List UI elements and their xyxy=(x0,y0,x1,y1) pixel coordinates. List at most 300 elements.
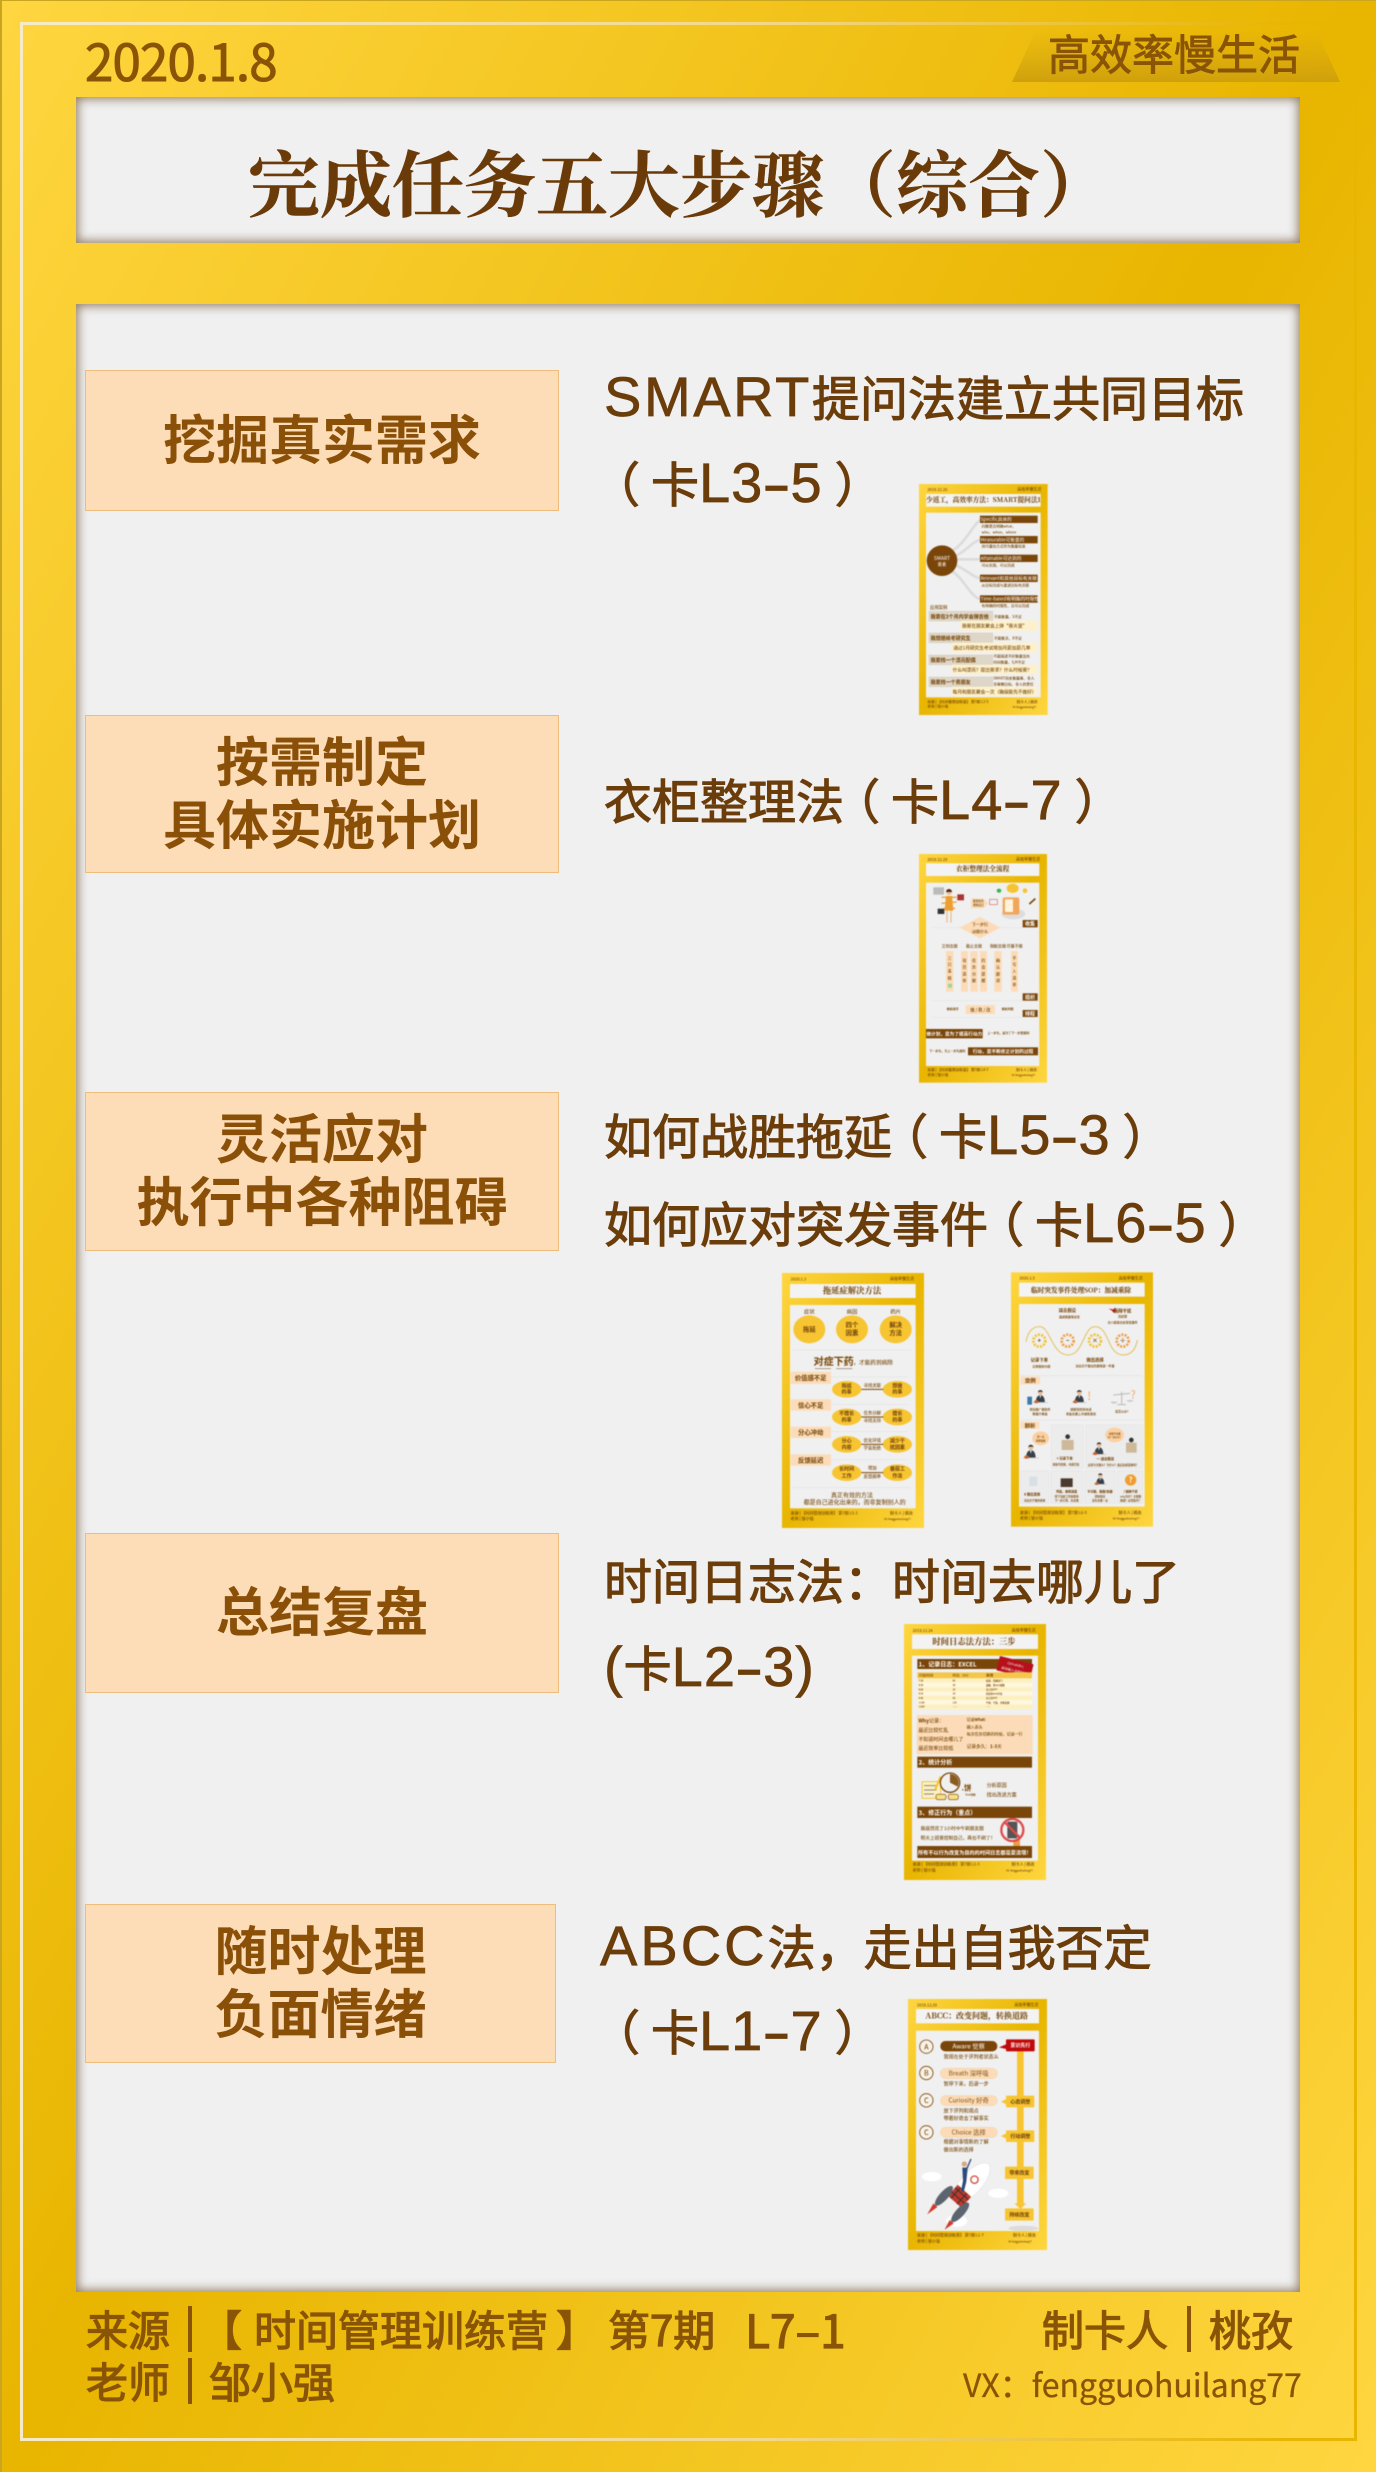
thumbnail: wardrobe method: 目 xyxy=(962,965,966,971)
thumbnail: time log: .饼 xyxy=(962,1783,972,1794)
thumbnail: time log: 来源 | 【时间管理训练营】 第7期 L2-3 xyxy=(913,1861,980,1868)
thumbnail: time log: 起床、洗漱出门 xyxy=(986,1679,1003,1683)
thumbnail: procrastination: ，才能药到病除 xyxy=(853,1357,893,1366)
thumbnail: procrastination: 拖延 xyxy=(803,1324,816,1333)
thumbnail: time log: 查工作PPT xyxy=(986,1687,998,1691)
thumbnail: emergency SOP: 迅如雷 xyxy=(1118,1314,1127,1319)
step 2 text: 衣柜整理法（卡L4–7） xyxy=(604,763,1123,833)
thumbnail: emergency SOP: 离线？必须放弃？ xyxy=(1120,1498,1141,1502)
thumbnail: SMART: 我要找一个漂亮配偶 xyxy=(931,657,976,664)
date: 2020.1.8 xyxy=(85,22,277,96)
thumbnail: SMART: 高效率慢生活 xyxy=(1017,486,1041,493)
thumbnail: emergency SOP xyxy=(1010,1272,1154,1528)
panel: main content xyxy=(76,304,1300,2292)
thumbnail: procrastination: 优化环境 xyxy=(864,1437,882,1444)
thumbnail: time log: 记录What: xyxy=(967,1716,986,1723)
step 3 text line 2: 如何应对突发事件（卡L6–5） xyxy=(604,1186,1267,1256)
thumbnail: wardrobe method: 下一步行 xyxy=(972,921,988,928)
thumbnail: ABCC: Choice 选择 xyxy=(952,2127,986,2136)
thumbnail: emergency SOP: why为什？主要做 xyxy=(1120,1494,1142,1498)
step 4 label xyxy=(85,1533,559,1693)
thumbnail: SMART: 要素 xyxy=(938,561,947,568)
thumbnail: time log: 输入表头 xyxy=(967,1723,983,1730)
thumbnail: procrastination: 学会拒绝 xyxy=(864,1445,882,1452)
footer: teacher: 老师 xyxy=(86,2350,170,2411)
thumbnail: wardrobe method: 务 xyxy=(972,964,976,971)
thumbnail: emergency SOP: 来源 | 【时间管理训练营】 第7期 L6-5 xyxy=(1020,1509,1087,1516)
thumbnail: wardrobe method: 写 xyxy=(1012,962,1016,968)
footer: author: 制卡人 xyxy=(1042,2298,1168,2359)
thumbnail: procrastination: 的事 xyxy=(892,1417,902,1424)
thumbnail: SMART: 应用案例 xyxy=(930,604,947,611)
thumbnail: SMART: 不能衡量、S不足 xyxy=(994,614,1022,620)
thumbnail: time log: 时长（m） xyxy=(953,1673,971,1679)
thumbnail: ABCC: B xyxy=(924,2069,929,2079)
thumbnail: procrastination: 病因 xyxy=(847,1307,857,1315)
thumbnail: emergency SOP: 必须今天做么？为什么？最后完成就够吗？ xyxy=(1088,1463,1138,1467)
thumbnail: procrastination: 反馈频率 xyxy=(864,1473,882,1480)
thumbnail: SMART: who、when、where xyxy=(982,530,1016,535)
thumbnail: wardrobe method: 行动，是不断修正计划的过程 xyxy=(973,1048,1034,1055)
thumbnail: wardrobe method: 做计划，是为了提高行动力 xyxy=(926,1030,983,1037)
thumbnail: wardrobe method: VX: fengguohuilang77 xyxy=(1012,1073,1036,1077)
thumbnail: procrastination: 减少干 xyxy=(890,1437,905,1444)
thumbnail: procrastination: 反馈延迟 xyxy=(798,1455,824,1464)
thumbnail: emergency SOP: 老师 | 邹小强 xyxy=(1020,1514,1043,1521)
thumbnail: procrastination: 2020.1.3 xyxy=(791,1276,806,1282)
thumbnail: procrastination: 解决 xyxy=(889,1320,903,1329)
thumbnail: time log: 不知道时间去哪儿了 xyxy=(918,1736,963,1743)
thumbnail: wardrobe method: 认 xyxy=(996,964,1000,971)
thumbnail: time log: 开始时间 xyxy=(919,1673,934,1679)
thumbnail: emergency SOP: + xyxy=(1038,1336,1042,1345)
thumbnail: emergency SOP: − xyxy=(1066,1336,1070,1345)
thumbnail: time log: 查工作PPT xyxy=(986,1696,998,1700)
step 1 text: SMART提问法建立共同目标 xyxy=(604,360,1244,430)
thumbnail: SMART: 制卡人 | 桃孜 xyxy=(1017,699,1038,705)
thumbnail: procrastination: 拖延症解决方法 xyxy=(823,1284,882,1296)
thumbnail: wardrobe method: 尽量不做 xyxy=(1007,943,1023,950)
thumbnail: ABCC xyxy=(907,1998,1048,2251)
thumbnail: procrastination: 来源 | 【时间管理训练营】 第7期 L5-3 xyxy=(791,1510,858,1517)
step 1 reference: （卡L3–5） xyxy=(592,446,883,516)
thumbnail: procrastination: 分心 xyxy=(842,1437,852,1444)
thumbnail: procrastination xyxy=(781,1272,925,1529)
thumbnail: ABCC: 做出新的选择 xyxy=(944,2147,974,2154)
thumbnail: SMART: 用可量化方式作为衡量标准 xyxy=(982,544,1026,550)
thumbnail: wardrobe method: 解 xyxy=(972,977,976,984)
thumbnail: emergency SOP: 制卡人 | 桃孜 xyxy=(1119,1509,1142,1516)
thumbnail: time log: 80 xyxy=(953,1696,956,1700)
thumbnail: SMART: 从目标完成与复述目标有关联 xyxy=(982,582,1030,588)
footer: source: L7–1 xyxy=(745,2296,846,2362)
thumbnail: time log: 找出改进方案 xyxy=(987,1792,1017,1799)
step 3 label: 执行中各种阻碍 xyxy=(136,1161,508,1237)
thumbnail: ABCC: C xyxy=(924,2096,929,2106)
thumbnail: wardrobe method: 排程 xyxy=(1025,1010,1035,1017)
thumbnail: time log: 明天上班要控制自己，再也不刷了！ xyxy=(921,1835,995,1842)
thumbnail: ABCC: 高效率慢生活 xyxy=(1014,2001,1038,2008)
thumbnail: wardrobe method: 分 xyxy=(972,970,976,977)
thumbnail: wardrobe method: 老师 | 邹小强 xyxy=(927,1072,949,1078)
thumbnail: ABCC: 心态调整 xyxy=(1010,2098,1030,2105)
thumbnail: time log: 每次任务切换的时候，记录一行 xyxy=(967,1730,1023,1737)
thumbnail: time log: 所有不以行为改变为目的的时间日志都是耍流氓！ xyxy=(918,1848,1031,1856)
thumbnail: time log: 20 xyxy=(953,1692,956,1696)
thumbnail: wardrobe method: 项 xyxy=(962,957,966,964)
thumbnail: SMART: Specific具体的 xyxy=(981,516,1012,523)
thumbnail: time log: 9:20 xyxy=(919,1692,924,1696)
thumbnail: emergency SOP: 去人能接去处突发事件 xyxy=(1108,1319,1138,1324)
thumbnail: SMART: Measurable可衡量的 xyxy=(981,536,1025,543)
thumbnail: emergency SOP: 不可能、能做/热做 xyxy=(1087,1489,1113,1494)
thumbnail: SMART: Time-based有明确的时限性 xyxy=(981,596,1039,603)
thumbnail: SMART: 我要找一个男朋友 xyxy=(931,679,971,686)
thumbnail: wardrobe method: 来源 | 【时间管理训练营】 第7期 L4-7 xyxy=(927,1067,988,1073)
step 4 label: 总结复盘 xyxy=(216,1571,428,1647)
thumbnail: wardrobe method: 动做什么 xyxy=(972,928,988,935)
thumbnail: procrastination: 扰因素 xyxy=(890,1444,905,1451)
thumbnail: time log: …… xyxy=(986,1705,991,1709)
thumbnail: procrastination: 拖延 xyxy=(842,1382,852,1389)
thumbnail: wardrobe method: 跟 xyxy=(996,970,1000,977)
thumbnail: ABCC: Aware 觉察 xyxy=(952,2041,986,2050)
thumbnail: SMART: 时间衡量、S,M不足 xyxy=(993,659,1025,665)
thumbnail: ABCC: 根据对事情新的了解 xyxy=(944,2139,989,2146)
step 2 label: 按需制定 xyxy=(216,720,428,796)
thumbnail: time log: …… xyxy=(953,1705,958,1709)
thumbnail: wardrobe method: 清 xyxy=(962,970,966,977)
thumbnail: procrastination: 方法 xyxy=(889,1328,903,1337)
thumbnail: ABCC: 带来改变 xyxy=(1009,2170,1029,2177)
thumbnail: ABCC: 行动调整 xyxy=(1010,2133,1030,2140)
thumbnail: SMART: 什么叫漂亮？提出要求？什么时候要？ xyxy=(953,666,1032,673)
thumbnail: wardrobe method: 会 xyxy=(981,964,985,971)
thumbnail: procrastination: 内容 xyxy=(842,1444,852,1451)
thumbnail: procrastination: 寻找关联 xyxy=(864,1382,882,1389)
thumbnail: time log: 120 xyxy=(953,1700,957,1704)
thumbnail: wardrobe method: 组织 xyxy=(1025,994,1035,1001)
thumbnail: time log: 午休、午饭、查朋友圈 xyxy=(986,1700,1010,1704)
thumbnail: ABCC: 暂停下来，后退一步 xyxy=(944,2081,989,2088)
thumbnail: wardrobe method: 指配去做 xyxy=(990,943,1006,950)
step 5 label xyxy=(85,1904,556,2063)
footer: source xyxy=(86,2296,846,2362)
step 4 reference: (卡L2–3) xyxy=(604,1630,815,1700)
thumbnail: time log: 9:40 xyxy=(919,1696,924,1700)
thumbnail: procrastination: 制卡人 | 桃孜 xyxy=(890,1510,913,1517)
step 5 reference: （卡L1–7） xyxy=(592,1994,883,2064)
step 3 text line 1: 如何战胜拖延（卡L5–3） xyxy=(604,1098,1171,1168)
thumbnail: SMART: 不能描述不好衡量没有 xyxy=(993,654,1030,660)
thumbnail: emergency SOP: 想到该做 xyxy=(1036,1438,1046,1442)
footer: author xyxy=(1042,2298,1293,2359)
thumbnail: emergency SOP: VX: fengguohuilang77 xyxy=(1113,1516,1140,1520)
thumbnail: wardrobe method: 确 xyxy=(996,957,1000,964)
thumbnail: emergency SOP: ! xyxy=(1087,1388,1091,1404)
footer: source: 来源 xyxy=(86,2298,170,2359)
thumbnail: SMART: 每月和朋友聚会一次（确保能先不做好） xyxy=(953,689,1036,696)
thumbnail: wardrobe method: 做 / 救 / 改 xyxy=(970,1006,991,1013)
thumbnail: emergency SOP: 重新代表情、内容已知 xyxy=(1053,1462,1080,1466)
thumbnail: emergency SOP: 第一天 xyxy=(1037,1435,1045,1439)
thumbnail: time log: 60 xyxy=(953,1679,956,1683)
thumbnail: procrastination: 寻找支持 xyxy=(864,1417,882,1424)
thumbnail: emergency SOP: × xyxy=(1092,1336,1098,1345)
thumbnail: emergency SOP: 画除干扰 xyxy=(1114,1307,1132,1314)
thumbnail: emergency SOP: 该怎么办? xyxy=(1115,1408,1129,1413)
thumbnail: time log: 时间日志法方法：三步 xyxy=(932,1635,1016,1647)
thumbnail: procrastination: 增加 xyxy=(868,1465,877,1472)
thumbnail: time log: Excel饼图 xyxy=(965,1792,976,1796)
step 5 label: 随时处理 xyxy=(214,1910,426,1986)
thumbnail: time log: 自动输入当前时间 xyxy=(1001,1665,1028,1676)
thumbnail: wardrobe method: 只 xyxy=(948,962,952,968)
brand tab xyxy=(1012,22,1340,83)
thumbnail: wardrobe method: 制卡人 | 桃孜 xyxy=(1016,1067,1037,1073)
thumbnail: emergency SOP: 记录假的内容 xyxy=(1032,1364,1050,1369)
thumbnail: SMART: 非事需目标、非人的责任 xyxy=(993,681,1034,687)
thumbnail: SMART: 有明确的时限性，且可以完成 xyxy=(982,603,1030,609)
thumbnail: wardrobe method: 衣柜整理法全流程 xyxy=(956,863,1010,873)
thumbnail: SMART: Attainable可达到的 xyxy=(981,555,1022,562)
thumbnail: procrastination: 对症下药 xyxy=(814,1353,854,1368)
thumbnail: wardrobe method: 收集 xyxy=(1025,921,1035,928)
thumbnail: ABCC: Curiosity 好奇 xyxy=(949,2096,989,2105)
thumbnail: ABCC: VX: fengguohuilang77 xyxy=(1008,2239,1033,2243)
thumbnail: SMART: 我想继续考研究生 xyxy=(931,635,971,642)
panel: title xyxy=(76,97,1300,243)
thumbnail: procrastination: 药片 xyxy=(890,1307,901,1315)
thumbnail: wardrobe method: 单 xyxy=(1012,981,1016,988)
thumbnail: SMART: Relevant和其他目标有关联 xyxy=(981,575,1037,582)
thumbnail: ABCC: 意识先行 xyxy=(1010,2042,1030,2049)
thumbnail: procrastination: 信心不足 xyxy=(798,1400,824,1409)
thumbnail: procrastination: 分心冲动 xyxy=(798,1428,824,1437)
thumbnail: SMART: 可以实现、可以完成 xyxy=(982,562,1015,568)
thumbnail: time log: 我居然花了1小时中午刷朋友圈 xyxy=(921,1825,984,1832)
thumbnail: ABCC: 放下评判和观点 xyxy=(944,2108,979,2115)
thumbnail: time log: 事情 xyxy=(986,1673,994,1679)
footer: source: 时间管理训练营 xyxy=(254,2298,548,2359)
thumbnail: wardrobe method: 提 xyxy=(981,970,985,977)
thumbnail: ABCC: 我现在处于评判者状态么 xyxy=(944,2053,999,2060)
thumbnail: time log: Ctrl+shift+; xyxy=(1007,1660,1025,1669)
thumbnail: emergency SOP: X 做出选择 xyxy=(1024,1491,1041,1496)
thumbnail: wardrobe method: 三 xyxy=(948,955,952,961)
thumbnail: procrastination: 四个 xyxy=(846,1320,859,1329)
thumbnail: emergency SOP: 整理不重造 xyxy=(1032,1411,1048,1416)
thumbnail: time log: 回复和xxxx开会 xyxy=(986,1692,1003,1696)
thumbnail: ABCC: Breath 深呼吸 xyxy=(949,2069,989,2078)
thumbnail: ABCC: A xyxy=(924,2042,929,2052)
thumbnail: time log: 2、统计分析 xyxy=(919,1758,952,1767)
tab trapezoid xyxy=(1012,48,1340,82)
thumbnail: time log: 11:00 xyxy=(919,1700,925,1704)
thumbnail: wardrobe method: 下一步先，为上一步先顺利 xyxy=(929,1048,965,1053)
thumbnail: time log: 最近比较忙乱 xyxy=(918,1727,948,1734)
thumbnail: time log: 分析原因 xyxy=(987,1782,1007,1789)
footer: author: 桃孜 xyxy=(1209,2298,1293,2359)
footer: source: 第7期 xyxy=(608,2298,715,2359)
footer: teacher xyxy=(86,2350,335,2411)
thumbnail: procrastination: 工作 xyxy=(842,1472,852,1479)
thumbnail: SMART: VX: fengguohuilang77 xyxy=(1013,705,1037,709)
thumbnail: procrastination: 价值感不足 xyxy=(795,1373,827,1382)
thumbnail: time log: 制卡人 | 桃孜 xyxy=(1012,1861,1035,1868)
thumbnail: procrastination: 不擅长 xyxy=(839,1410,854,1417)
thumbnail: emergency SOP: 高效率慢生活 xyxy=(1119,1274,1143,1281)
thumbnail: procrastination: 的事 xyxy=(842,1417,852,1424)
thumbnail: ABCC: 2019.12.20 xyxy=(917,2003,938,2009)
step 5 text: ABCC法，走出自我否定 xyxy=(600,1909,1152,1979)
thumbnail: time log: 13:00 xyxy=(919,1705,925,1709)
thumbnail: procrastination: 想做 xyxy=(892,1382,902,1389)
step 2 label xyxy=(85,715,559,873)
brand text: 高效率慢生活 xyxy=(1048,22,1300,83)
thumbnail: wardrobe method: 拿到任务 xyxy=(973,899,984,903)
thumbnail: wardrobe method: 重新排序 xyxy=(947,1006,959,1011)
thumbnail: ABCC: 持续改变 xyxy=(1009,2211,1029,2218)
thumbnail: SMART: 2019.12.26 xyxy=(927,487,948,493)
thumbnail: emergency SOP: 记录下来 xyxy=(1031,1357,1049,1364)
thumbnail: emergency SOP: 决出关于做的事情 xyxy=(1024,1498,1046,1502)
thumbnail: ABCC: 来源 | 【时间管理训练营】 第7期 L1-7 xyxy=(917,2232,985,2239)
step 4 text: 时间日志法：时间去哪儿了 xyxy=(604,1543,1180,1613)
thumbnail: emergency SOP: 找快答应 xyxy=(1095,1494,1106,1498)
thumbnail: time log: 8:30 xyxy=(919,1683,924,1687)
thumbnail: ABCC: 制卡人 | 桃孜 xyxy=(1013,2232,1036,2239)
thumbnail: time log: VX: fengguohuilang77 xyxy=(1006,1869,1033,1873)
thumbnail: wardrobe method: 单 xyxy=(962,977,966,984)
thumbnail: emergency SOP: 下一步打算、先去做 xyxy=(1055,1498,1079,1502)
thumbnail: procrastination: VX: fengguohuilang77 xyxy=(884,1517,911,1521)
thumbnail: emergency SOP: 项目推广做软件 xyxy=(1029,1407,1051,1412)
footer: teacher: 邹小强 xyxy=(209,2350,335,2411)
thumbnail: wardrobe method: 2019.12.29 xyxy=(927,857,947,863)
thumbnail: SMART: 少返工，高效率方法：SMART提问法1 xyxy=(926,494,1041,505)
thumbnail: ABCC: 老师 | 邹小强 xyxy=(917,2237,940,2244)
thumbnail: procrastination: 老师 | 邹小强 xyxy=(791,1515,814,1522)
thumbnail: wardrobe method: 清 xyxy=(1012,974,1016,981)
thumbnail: SMART: SMART xyxy=(934,555,950,562)
thumbnail: emergency SOP: 该先去做一点 xyxy=(1092,1498,1108,1502)
thumbnail: emergency SOP: 找下当前工作重要的 xyxy=(1055,1494,1079,1498)
thumbnail: time log: 9:00 xyxy=(919,1687,924,1691)
thumbnail: emergency SOP: ? xyxy=(1129,1475,1133,1486)
thumbnail: SMART: 我要在朋友聚会上弹“春天里” xyxy=(962,623,1027,630)
thumbnail: emergency SOP: 温感假事情急性 xyxy=(1059,1314,1080,1319)
thumbnail: time log: 2019.12.24 xyxy=(913,1628,933,1634)
thumbnail: SMART: 老师 | 邹小强 xyxy=(927,704,949,710)
thumbnail: emergency SOP: 2020.1.5 xyxy=(1019,1276,1035,1282)
thumbnail: emergency SOP: ? xyxy=(1131,1388,1136,1403)
thumbnail: emergency SOP: 必须今天做 xyxy=(1109,1431,1121,1435)
thumbnail: time log: 通勤、看xxxx视频 xyxy=(986,1683,1005,1687)
thumbnail: SMART: 来源 | 【时间管理训练营】 第7期 L3-5 xyxy=(927,699,988,705)
footer: source: 】 xyxy=(556,2298,598,2359)
thumbnail: wardrobe method: 醒 xyxy=(981,977,985,984)
footer: source: 【 xyxy=(200,2298,242,2359)
thumbnail: SMART: 不能衡关、R不足 xyxy=(994,636,1022,642)
thumbnail: time log xyxy=(903,1623,1047,1881)
thumbnail: procrastination: 症状 xyxy=(804,1307,815,1315)
thumbnail: SMART: 我要在3个月内学会弹吉他 xyxy=(931,613,989,620)
step 1 label xyxy=(85,370,559,511)
thumbnail: time log: 老师 | 邹小强 xyxy=(913,1866,936,1873)
thumbnail: wardrobe method: 约 xyxy=(981,957,985,964)
thumbnail: procrastination: 作法 xyxy=(892,1472,902,1479)
thumbnail: wardrobe method: 青 xyxy=(948,968,952,975)
thumbnail: emergency SOP: 临时突发事件处理SOP：加减乘除 xyxy=(1031,1284,1132,1294)
thumbnail: emergency SOP: ÷ xyxy=(1120,1336,1125,1345)
thumbnail: procrastination: 高效率慢生活 xyxy=(890,1275,914,1282)
thumbnail: procrastination: 都是自己进化出来的，而非复制别人的 xyxy=(804,1497,906,1506)
thumbnail: emergency SOP: 决出关于做出的事情第一件事 xyxy=(1075,1363,1115,1368)
thumbnail: wardrobe method: 立刻去做 xyxy=(942,943,958,950)
thumbnail: procrastination: 因素 xyxy=(846,1328,859,1337)
thumbnail: wardrobe method: 入 xyxy=(1012,969,1016,975)
thumbnail: emergency SOP: 一 减去假设 xyxy=(1097,1456,1115,1461)
thumbnail: emergency SOP: + 记录下来 xyxy=(1057,1455,1073,1460)
thumbnail: time log: 30 xyxy=(953,1683,956,1687)
thumbnail: SMART xyxy=(918,483,1048,716)
title: 完成任务五大步骤（综合） xyxy=(248,128,1112,232)
thumbnail: time log: 7:30 xyxy=(919,1679,924,1683)
step 1 label: 挖掘真实需求 xyxy=(163,398,481,474)
step 3 label xyxy=(85,1092,559,1251)
thumbnail: ABCC: 带着好奇去了解事实 xyxy=(944,2115,989,2122)
thumbnail: procrastination: 长时间 xyxy=(839,1466,854,1473)
thumbnail: wardrobe method xyxy=(918,853,1048,1084)
step 3 label: 灵活应对 xyxy=(216,1098,428,1174)
thumbnail: emergency SOP: 列表、看帮进度 xyxy=(1056,1489,1077,1494)
thumbnail: wardrobe method: 上一步先，是为了下一步更顺利 xyxy=(987,1030,1029,1035)
thumbnail: SMART: 通过1月研究生考试增加月薪加薪几率 xyxy=(953,644,1031,651)
thumbnail: time log: Why记录： xyxy=(918,1718,944,1725)
thumbnail: time log: 最近效率比较低 xyxy=(918,1745,953,1752)
thumbnail: time log: 高效率慢生活 xyxy=(1012,1626,1036,1633)
thumbnail: emergency SOP: 做出选择 xyxy=(1086,1357,1104,1364)
thumbnail: wardrobe method: 蛙 xyxy=(948,974,952,981)
thumbnail: time log: 3、修正行为（重点） xyxy=(919,1808,976,1817)
thumbnail: procrastination: 番茄工 xyxy=(890,1466,905,1473)
thumbnail: wardrobe method: 找到自己 xyxy=(973,903,984,907)
thumbnail: time log: 20 xyxy=(953,1687,956,1691)
thumbnail: ABCC: C xyxy=(924,2128,929,2138)
thumbnail: emergency SOP: 减去假设 xyxy=(1059,1307,1077,1314)
step 5 label: 负面情绪 xyxy=(214,1973,426,2049)
thumbnail: wardrobe method: 进 xyxy=(996,977,1000,984)
thumbnail: ABCC: ABCC：改变问题，转换道路 xyxy=(925,2011,1028,2022)
thumbnail: emergency SOP: 案例 xyxy=(1025,1377,1036,1385)
thumbnail: wardrobe method: 截止去做 xyxy=(966,943,982,950)
thumbnail: wardrobe method: 任 xyxy=(972,957,976,964)
thumbnail: procrastination: 擅长 xyxy=(892,1410,902,1417)
thumbnail: emergency SOP: 顾客突然来电话 xyxy=(1070,1407,1092,1412)
thumbnail: procrastination: 真正有效的方法 xyxy=(831,1490,873,1499)
thumbnail: emergency SOP: 老板急要上月销售报表 xyxy=(1066,1411,1096,1416)
thumbnail: emergency SOP: 么？为什么？ xyxy=(1108,1435,1122,1439)
thumbnail: wardrobe method: 高效率慢生活 xyxy=(1016,856,1040,863)
thumbnail: time log: 1、记录日志：EXCEL xyxy=(919,1660,977,1669)
thumbnail: wardrobe method: 手 xyxy=(1012,954,1016,961)
thumbnail: emergency SOP: / 画除干扰 xyxy=(1124,1489,1138,1494)
thumbnail: procrastination: 任务分解 xyxy=(864,1410,882,1417)
thumbnail: SMART: 问题是否明确what、 xyxy=(982,523,1016,529)
thumbnail: procrastination: 的事 xyxy=(842,1389,852,1396)
thumbnail: wardrobe method: 重新判断 xyxy=(1002,1006,1014,1011)
